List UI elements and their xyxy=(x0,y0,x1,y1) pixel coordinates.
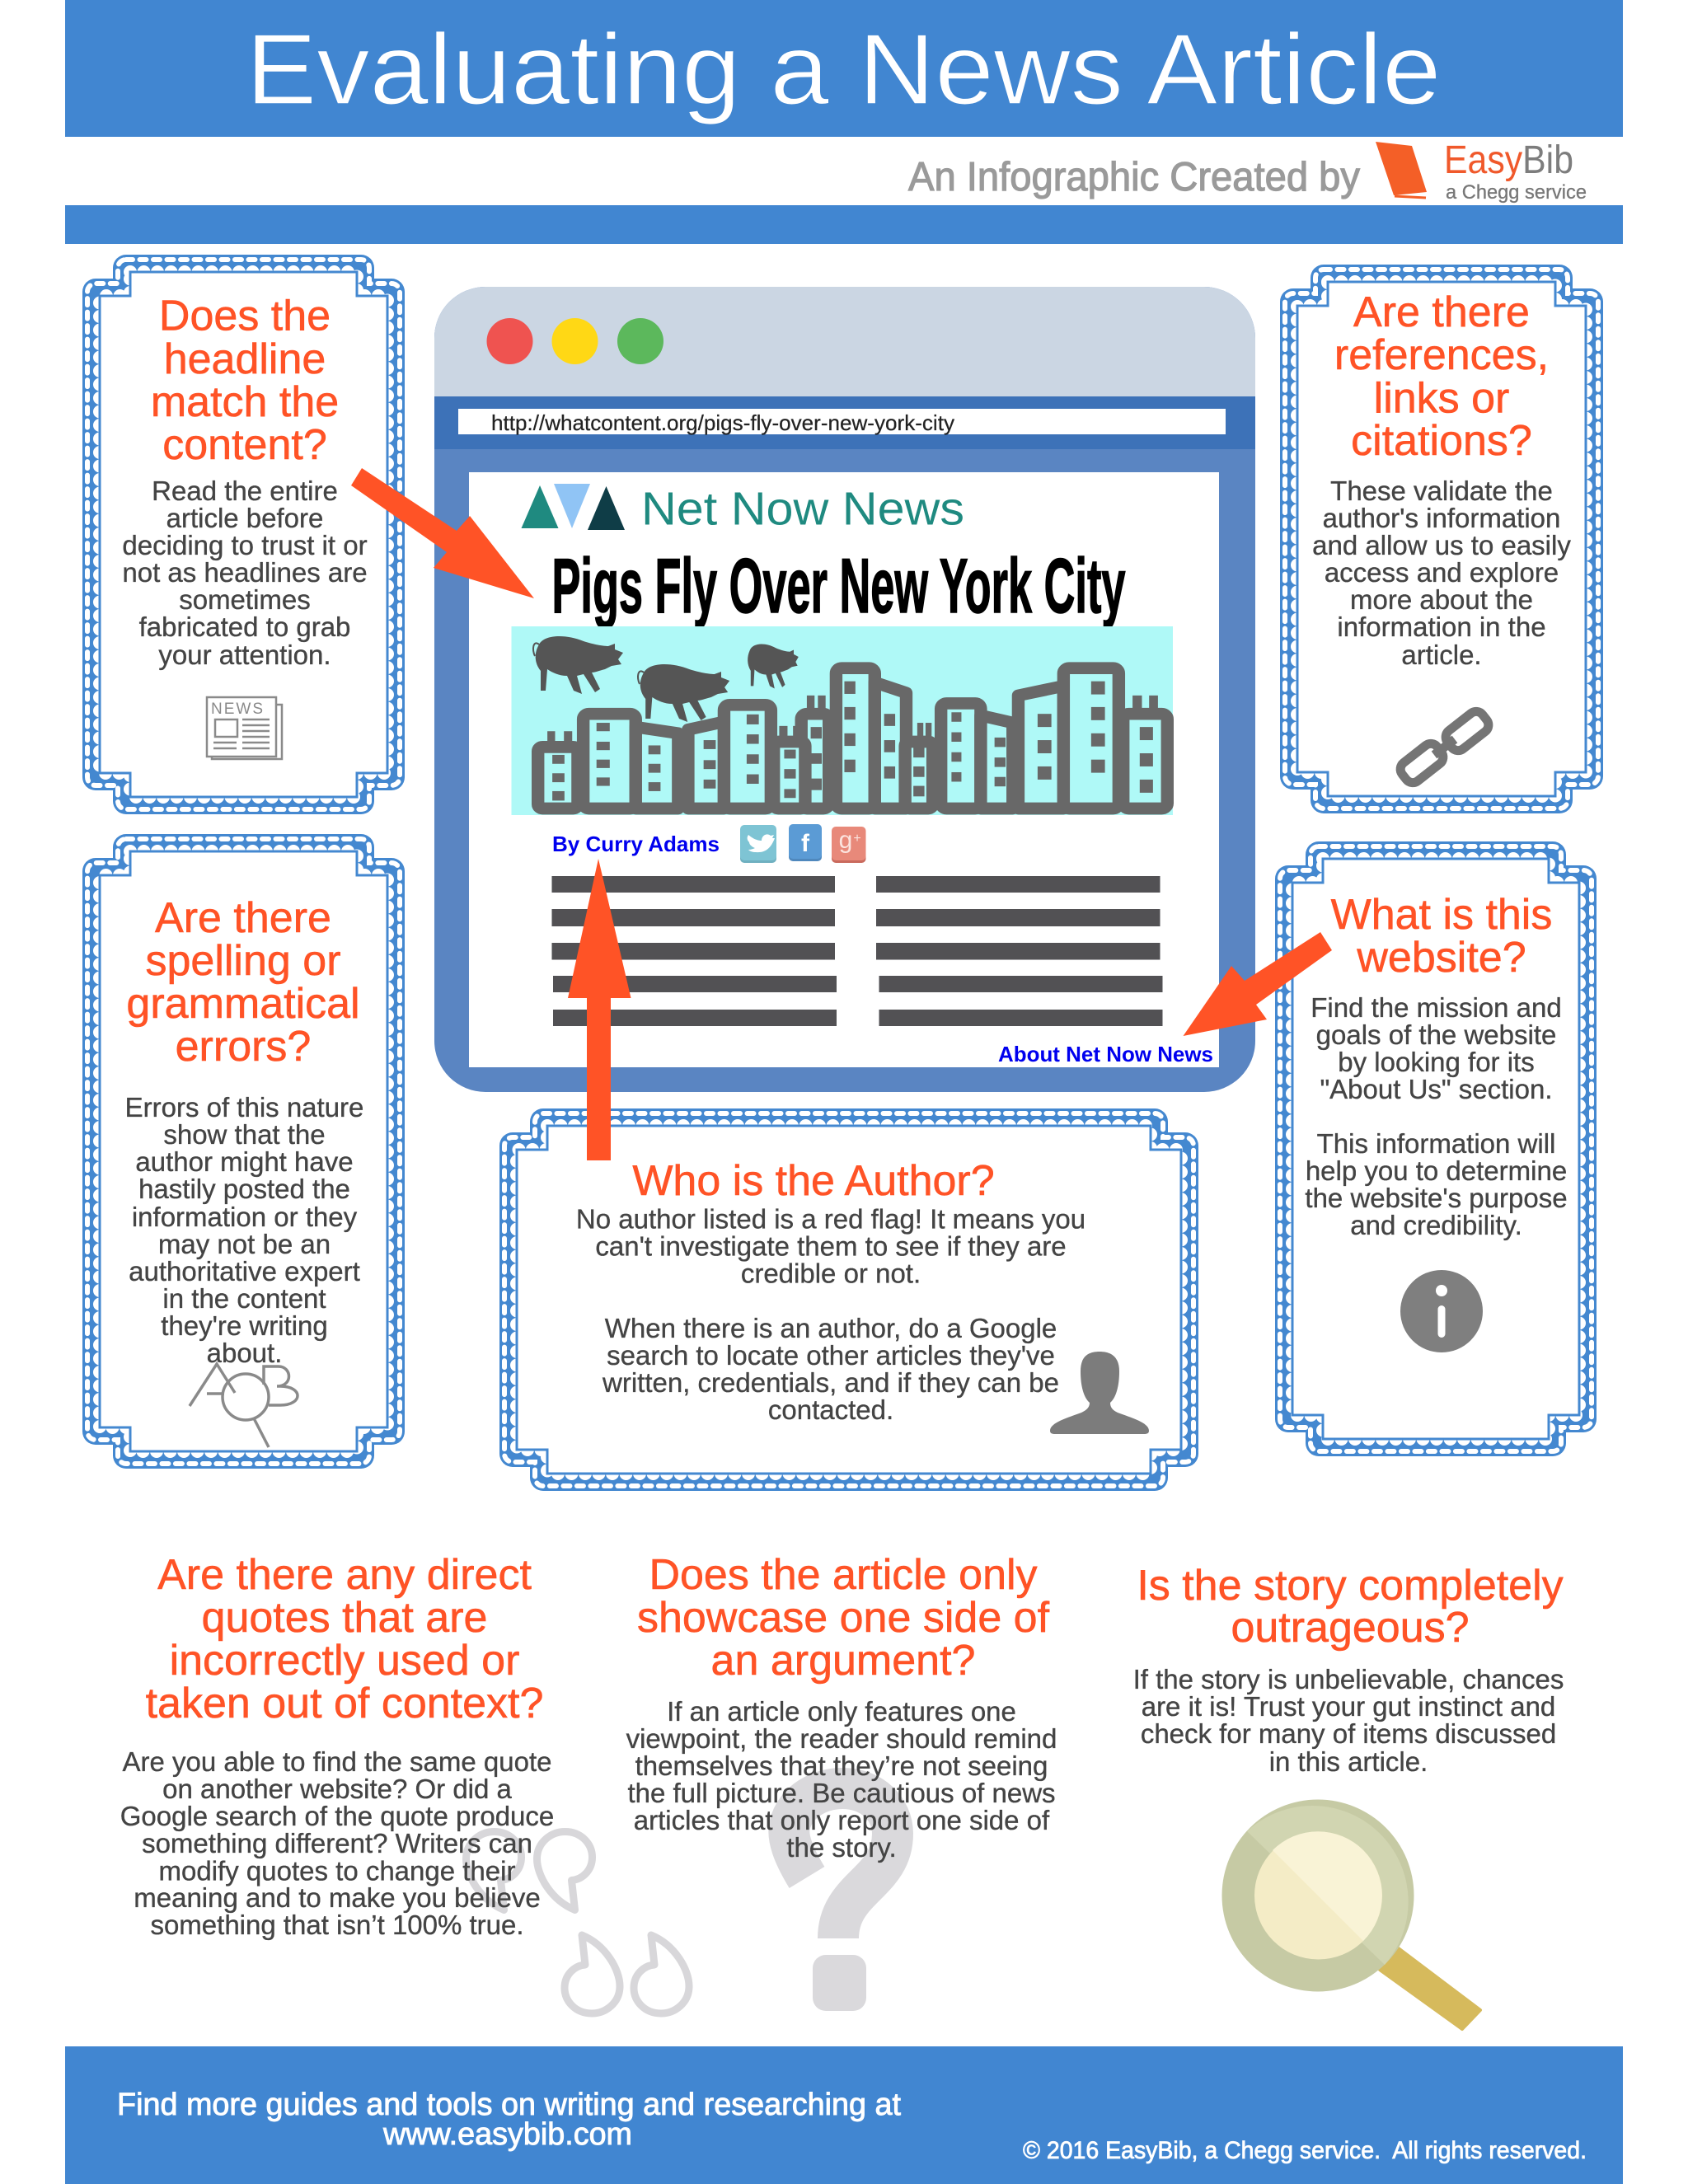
body text: "About Us" section. xyxy=(1320,1074,1553,1104)
arrow: to author byline xyxy=(568,859,631,1160)
body text: author might have xyxy=(135,1146,354,1177)
body text: they're writing xyxy=(161,1310,328,1341)
pig middle xyxy=(638,664,729,722)
header banner xyxy=(65,0,1623,137)
body text: the website's purpose xyxy=(1305,1183,1568,1213)
heading: citations? xyxy=(1351,417,1532,465)
heading: website? xyxy=(1356,934,1526,982)
icon: google plus: g xyxy=(839,827,852,854)
icon: information xyxy=(1400,1270,1483,1352)
body text: contacted. xyxy=(768,1394,893,1425)
body text: Errors of this nature xyxy=(125,1092,363,1122)
credit line: An Infographic Created by xyxy=(908,155,1360,199)
heading: showcase one side of xyxy=(637,1594,1050,1642)
heading: taken out of context? xyxy=(146,1680,543,1727)
body text: your attention. xyxy=(158,640,331,670)
heading: What is this xyxy=(1331,891,1552,939)
skyline xyxy=(538,668,1167,808)
body text: hastily posted the xyxy=(138,1174,350,1204)
body text: author's information xyxy=(1323,503,1560,533)
article illustration xyxy=(511,626,1173,815)
icon: facebook: f xyxy=(801,830,810,857)
body text: deciding to trust it or xyxy=(122,530,368,560)
body text: Find the mission and xyxy=(1311,992,1562,1023)
address bar xyxy=(434,396,1255,449)
body text: information or they xyxy=(132,1202,358,1232)
about link: About Net Now News xyxy=(998,1042,1213,1066)
body text: Are you able to find the same quote xyxy=(122,1746,552,1777)
heading: Does the article only xyxy=(649,1551,1038,1599)
body text: the full picture. Be cautious of news xyxy=(627,1778,1056,1808)
body text: in this article. xyxy=(1269,1746,1428,1777)
body text xyxy=(1305,992,1568,1240)
heading: links or xyxy=(1374,374,1509,422)
heading: grammatical xyxy=(126,980,360,1028)
icon: newspaper: NEWS xyxy=(211,701,265,718)
heading: Are there any direct xyxy=(157,1551,532,1599)
Chegg service tagline: a Chegg service xyxy=(1446,181,1587,204)
window buttons xyxy=(486,318,663,364)
social icons xyxy=(740,824,865,863)
body text xyxy=(576,1203,1085,1425)
heading xyxy=(126,894,360,1071)
body text: on another website? Or did a xyxy=(162,1774,513,1804)
heading: Who is the Author? xyxy=(632,1157,995,1205)
heading xyxy=(1334,288,1549,465)
panel: who is the author xyxy=(499,1108,1198,1491)
body text: article. xyxy=(1401,640,1482,670)
body text: the story. xyxy=(786,1832,897,1863)
body text xyxy=(122,476,368,670)
web page content xyxy=(469,472,1219,1067)
body text: help you to determine xyxy=(1306,1155,1567,1186)
copyright: © 2016 EasyBib, a Chegg service. All rights reserved. xyxy=(1023,2137,1587,2164)
pig large left xyxy=(533,636,623,694)
body text: information in the xyxy=(1337,612,1546,642)
arrow: to about link xyxy=(1184,932,1332,1036)
heading: spelling or xyxy=(145,937,341,985)
body text: viewpoint, the reader should remind xyxy=(626,1723,1057,1754)
panel: what is this website xyxy=(1275,841,1597,1456)
icon: newspaper xyxy=(207,697,282,759)
credit line xyxy=(908,138,1587,204)
body text xyxy=(1312,476,1571,670)
heading: Does the xyxy=(159,292,331,340)
heading: outrageous? xyxy=(1231,1604,1470,1652)
body text: show that the xyxy=(163,1119,326,1150)
icon: twitter xyxy=(740,825,776,863)
heading: content? xyxy=(162,421,327,469)
body text: may not be an xyxy=(158,1229,331,1259)
panel: headline match xyxy=(82,255,405,814)
body text: meaning and to make you believe xyxy=(134,1882,541,1913)
body text: search to locate other articles they've xyxy=(607,1340,1055,1371)
blue divider bar xyxy=(65,205,1623,244)
heading: quotes that are xyxy=(202,1594,487,1642)
footer call to action: www.easybib.com xyxy=(382,2117,632,2152)
body text: modify quotes to change their xyxy=(159,1856,515,1886)
icon: google plus xyxy=(832,827,865,863)
body text: When there is an author, do a Google xyxy=(605,1313,1057,1343)
site logo: Net Now News xyxy=(641,483,964,536)
heading xyxy=(151,292,339,469)
article headline: Pigs Fly Over New York City xyxy=(552,542,1126,629)
body text: Read the entire xyxy=(152,476,338,506)
body text: sometimes xyxy=(179,584,311,615)
heading: Are there xyxy=(1353,288,1530,336)
body text: and allow us to easily xyxy=(1312,530,1571,560)
browser title bar xyxy=(434,287,1255,396)
body text: credible or not. xyxy=(741,1258,921,1289)
title: Evaluating a News Article xyxy=(246,13,1441,125)
footer call to action: Find more guides and tools on writing and researching at xyxy=(117,2088,901,2122)
EasyBib logo text: EasyBib xyxy=(1444,138,1573,182)
body text: can't investigate them to see if they are xyxy=(595,1231,1067,1261)
section: outrageous story xyxy=(1133,1562,1564,2029)
body text: check for many of items discussed xyxy=(1141,1718,1556,1749)
icon: facebook xyxy=(789,824,822,861)
icon: person xyxy=(1050,1352,1149,1434)
heading: Is the story completely xyxy=(1137,1562,1564,1610)
footer banner xyxy=(65,2046,1623,2184)
body text: articles that only report one side of xyxy=(634,1805,1050,1835)
body text: If an article only features one xyxy=(667,1696,1016,1727)
body text: themselves that they’re not seeing xyxy=(635,1750,1048,1781)
body text xyxy=(1133,1664,1564,1777)
body text: article before xyxy=(166,503,323,533)
heading xyxy=(637,1551,1050,1685)
body text xyxy=(626,1696,1057,1863)
icon: EasyBib book xyxy=(1376,142,1427,198)
body text: not as headlines are xyxy=(122,557,368,588)
heading xyxy=(1137,1562,1564,1652)
icon: quotation marks xyxy=(467,1831,689,2013)
heading xyxy=(146,1551,543,1727)
heading: references, xyxy=(1334,331,1549,379)
heading: Are there xyxy=(155,894,331,942)
address bar: http://whatcontent.org/pigs-fly-over-new-york-city xyxy=(491,410,954,435)
body text: by looking for its xyxy=(1338,1047,1535,1077)
article text lines xyxy=(552,876,1162,1026)
pig small xyxy=(748,644,799,688)
body text: about. xyxy=(207,1338,282,1368)
body text: fabricated to grab xyxy=(139,612,350,642)
body text xyxy=(125,1092,363,1368)
body text: No author listed is a red flag! It means you xyxy=(576,1203,1085,1235)
icon: A B magnifier xyxy=(190,1364,298,1447)
body text: and credibility. xyxy=(1350,1210,1522,1240)
browser window xyxy=(434,287,1255,1092)
body text: more about the xyxy=(1350,584,1533,615)
icon: google plus: + xyxy=(853,832,861,846)
body text: goals of the website xyxy=(1316,1019,1556,1050)
panel: references xyxy=(1280,265,1603,813)
body text: something different? Writers can xyxy=(142,1828,532,1858)
body text: are it is! Trust your gut instinct and xyxy=(1142,1691,1555,1722)
body text: These validate the xyxy=(1330,476,1553,506)
heading: match the xyxy=(151,378,339,426)
panel: spelling errors xyxy=(82,834,405,1469)
heading xyxy=(1331,891,1552,982)
heading: headline xyxy=(164,335,326,383)
footer call to action xyxy=(117,2088,901,2152)
heading: errors? xyxy=(176,1023,311,1071)
arrow: to headline xyxy=(351,468,534,598)
body text: If the story is unbelievable, chances xyxy=(1133,1664,1564,1694)
icon: chain link xyxy=(1397,708,1492,786)
section: one side of an argument xyxy=(626,1551,1057,1863)
body text: written, credentials, and if they can be xyxy=(602,1367,1059,1398)
body text: something that isn’t 100% true. xyxy=(150,1910,524,1940)
body text: This information will xyxy=(1317,1128,1555,1159)
icon: question mark xyxy=(789,1788,893,2011)
byline: By Curry Adams xyxy=(552,832,720,856)
body text: Google search of the quote produce xyxy=(120,1801,554,1831)
body text: access and explore xyxy=(1325,557,1559,588)
body text: in the content xyxy=(162,1283,326,1314)
icon: magnifying glass xyxy=(1221,1800,1480,2029)
body text: authoritative expert xyxy=(129,1256,360,1286)
section: direct quotes xyxy=(120,1551,554,1940)
heading: an argument? xyxy=(711,1637,975,1685)
heading: incorrectly used or xyxy=(170,1637,519,1685)
body text xyxy=(120,1746,554,1940)
